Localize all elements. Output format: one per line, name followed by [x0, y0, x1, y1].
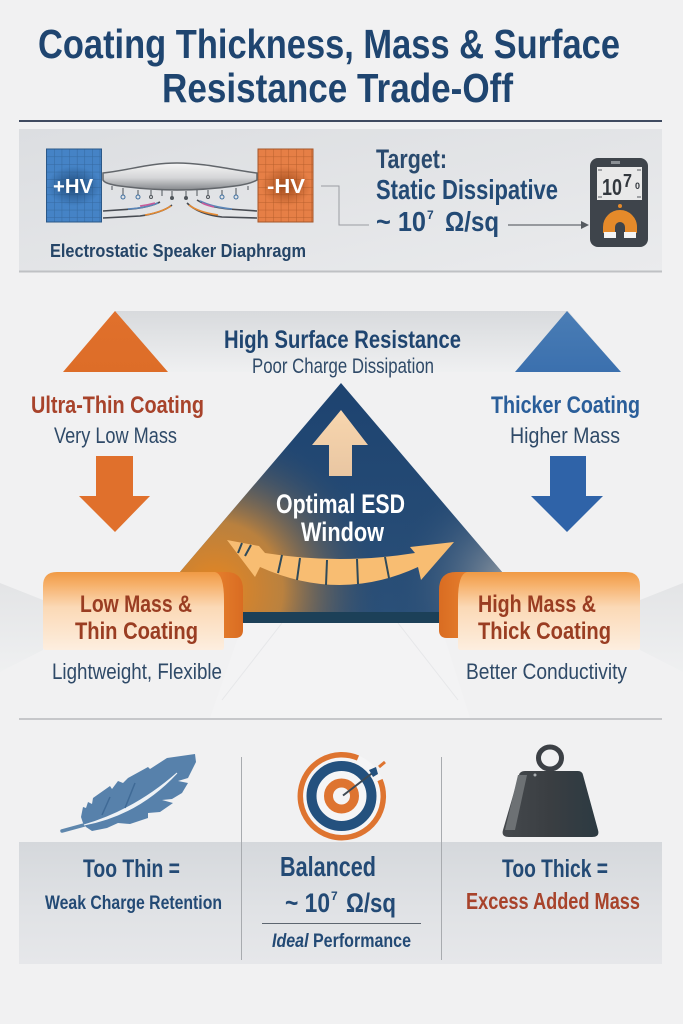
text: balanced: 7 [331, 889, 338, 903]
heading: high surface resistance: Poor Charge Dissipation [252, 355, 434, 378]
diaphragm lens [103, 163, 257, 190]
central triangle [139, 383, 543, 623]
caption: lightweight, flexible: Lightweight, Flexible [52, 659, 222, 684]
box: high mass and thick coating [439, 572, 640, 650]
blue down arrow [531, 456, 603, 532]
heading: high surface resistance: High Surface Resistance [224, 326, 461, 354]
text: too thin [45, 855, 222, 914]
target text [376, 144, 558, 237]
icon: resistance meter: 0 [635, 181, 640, 191]
icon: resistance meter: 7 [623, 171, 632, 191]
wires [103, 200, 257, 218]
panel: target and diaphragm [19, 129, 662, 272]
icon: resistance meter [590, 158, 648, 247]
text: balanced [262, 851, 421, 952]
caption: better conductivity: Better Conductivity [466, 659, 627, 684]
text: balanced: Ideal Performance [272, 931, 411, 952]
panel: outcomes [19, 747, 662, 964]
diagram: electrostatic speaker diaphragm [46, 149, 313, 261]
box: low mass and thin coating: Thin Coating [75, 618, 198, 645]
box: low mass and thin coating: Low Mass & [80, 591, 192, 618]
target text: 7 [427, 208, 434, 222]
text: ultra-thin coating: Very Low Mass [54, 423, 177, 448]
box: high mass and thick coating: Thick Coating [478, 618, 611, 645]
heading: high surface resistance [224, 326, 461, 378]
blue triangle [515, 311, 621, 372]
heading: optimal ESD window [276, 489, 405, 547]
target text: ~ 10 [376, 206, 426, 237]
text: thicker coating [491, 392, 640, 448]
positive electrode [46, 149, 102, 222]
text: balanced: Balanced [280, 851, 376, 882]
target text: Target: [376, 144, 447, 174]
orange down arrow [79, 456, 150, 532]
heading: optimal ESD window: Optimal ESD [276, 489, 405, 519]
text: too thin: Weak Charge Retention [45, 893, 222, 914]
text: too thin: Too Thin = [83, 855, 180, 883]
text: too thick: Excess Added Mass [466, 888, 640, 914]
text: ultra-thin coating [31, 392, 204, 448]
connector line [321, 186, 369, 225]
negative electrode [258, 149, 313, 222]
background shading: trade-off stage [0, 311, 683, 718]
text: too thick: Too Thick = [502, 855, 608, 883]
icon: target [298, 752, 386, 840]
text: thicker coating: Higher Mass [510, 423, 620, 448]
curved double arrow [227, 540, 454, 585]
text: balanced: Ω/sq [346, 888, 396, 918]
positive electrode: +HV [53, 176, 94, 198]
heading: optimal ESD window: Window [301, 517, 385, 547]
target text: Ω/sq [445, 206, 499, 237]
title: Resistance Trade-Off [162, 65, 513, 111]
orange triangle [63, 311, 168, 372]
up arrow [312, 410, 368, 476]
box: high mass and thick coating: High Mass & [478, 591, 596, 618]
icon: weight [503, 747, 598, 837]
icon: resistance meter: 10 [602, 174, 622, 200]
diaphragm label: Electrostatic Speaker Diaphragm [50, 241, 306, 261]
negative electrode: -HV [267, 176, 306, 198]
text: thicker coating: Thicker Coating [491, 392, 640, 419]
title [38, 21, 620, 111]
text: balanced: ~ 10 [285, 888, 330, 918]
suspension hooks [112, 186, 248, 200]
text: ultra-thin coating: Ultra-Thin Coating [31, 392, 204, 419]
arrow to meter [508, 221, 589, 229]
target text: Static Dissipative [376, 174, 558, 205]
icon: feather [62, 754, 196, 831]
base strip [243, 612, 440, 623]
text: too thick [466, 855, 640, 914]
box: low mass and thin coating [43, 572, 243, 650]
